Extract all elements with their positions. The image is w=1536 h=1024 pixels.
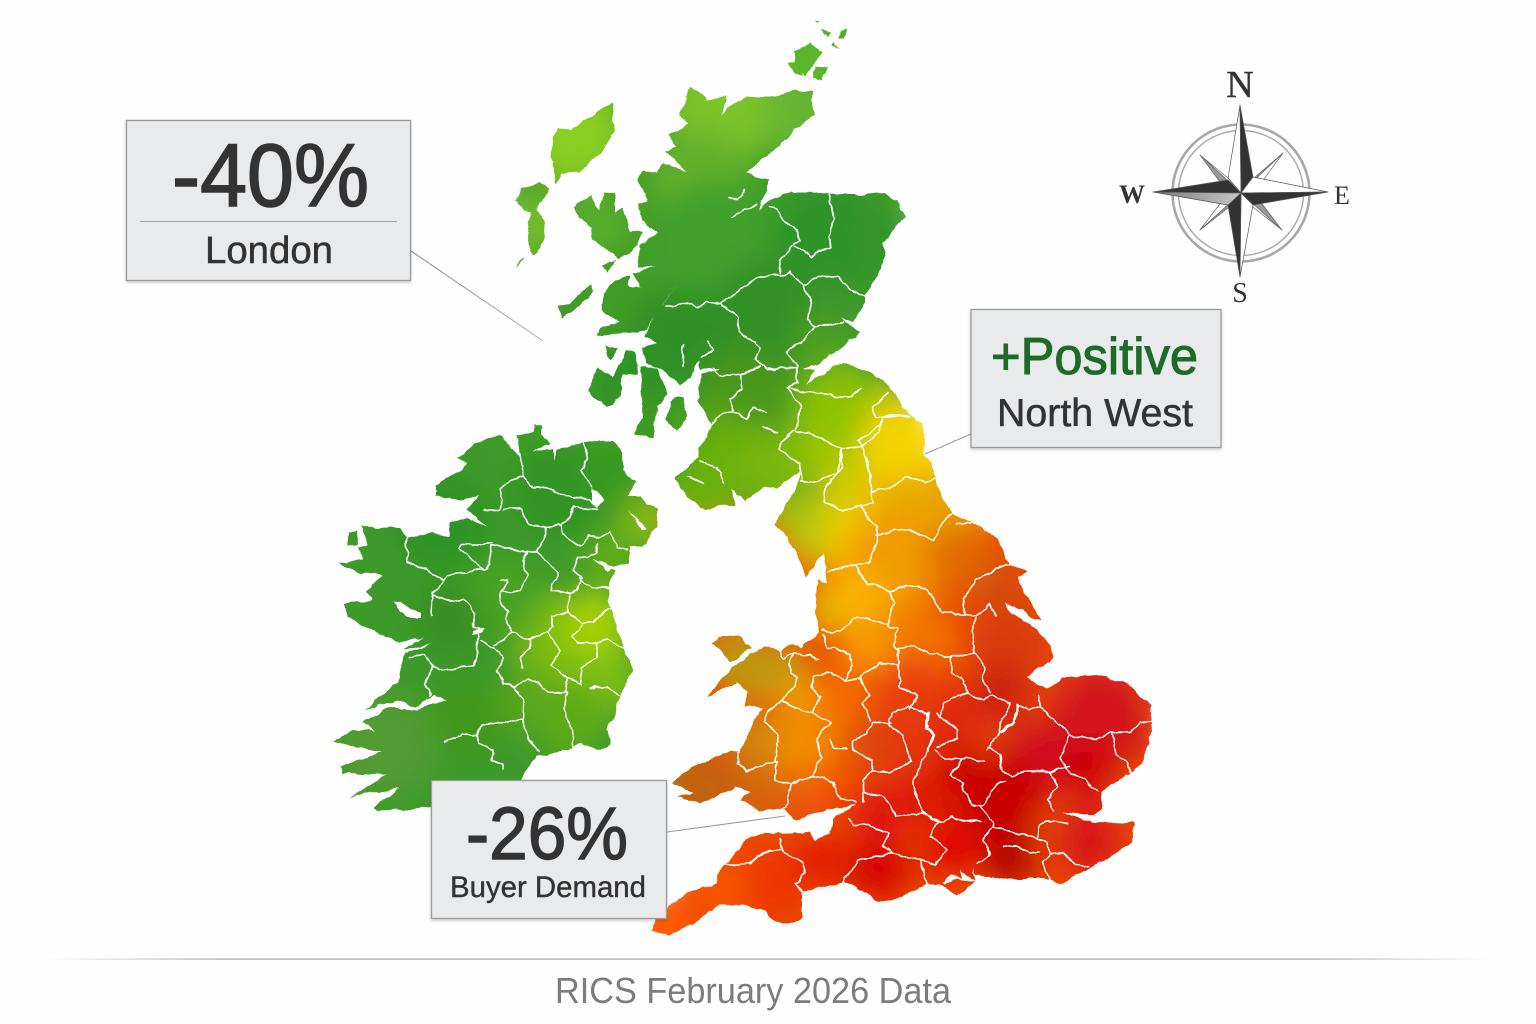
figure: -40%: -40% xyxy=(172,125,369,225)
callout: -26% Buyer Demand xyxy=(432,780,666,918)
footer rule xyxy=(45,958,1490,960)
compass letter N: N xyxy=(1226,64,1254,106)
choropleth colour field: green in the north and west, red in the south east xyxy=(332,20,1152,936)
label: North West: North West xyxy=(997,392,1193,435)
map of Britain and Ireland xyxy=(332,20,1152,936)
compass letter W: W xyxy=(1119,180,1145,209)
callout: -40% London xyxy=(126,120,410,280)
region borders: England and Wales xyxy=(723,416,1152,895)
cardinal points xyxy=(1153,105,1328,277)
figure: +Positive: +Positive xyxy=(991,328,1198,386)
compass rings xyxy=(1172,124,1310,262)
callout: +Positive North West xyxy=(971,310,1221,448)
leader line: North West callout xyxy=(925,434,971,454)
leader line: Buyer Demand callout xyxy=(667,816,785,832)
figure: -26%: -26% xyxy=(466,792,628,875)
compass letter E: E xyxy=(1334,181,1350,210)
compass rose xyxy=(1119,64,1350,309)
region borders: Ireland xyxy=(407,442,628,770)
label: Buyer Demand: Buyer Demand xyxy=(450,871,646,904)
diagonal points xyxy=(1200,153,1283,230)
region borders: Scotland xyxy=(665,190,908,492)
compass letter S: S xyxy=(1232,278,1248,309)
lakes and inlets xyxy=(392,488,975,884)
footer source: RICS February 2026 Data xyxy=(555,970,952,1011)
label: London: London xyxy=(205,230,333,272)
leader line: London callout xyxy=(411,251,543,341)
